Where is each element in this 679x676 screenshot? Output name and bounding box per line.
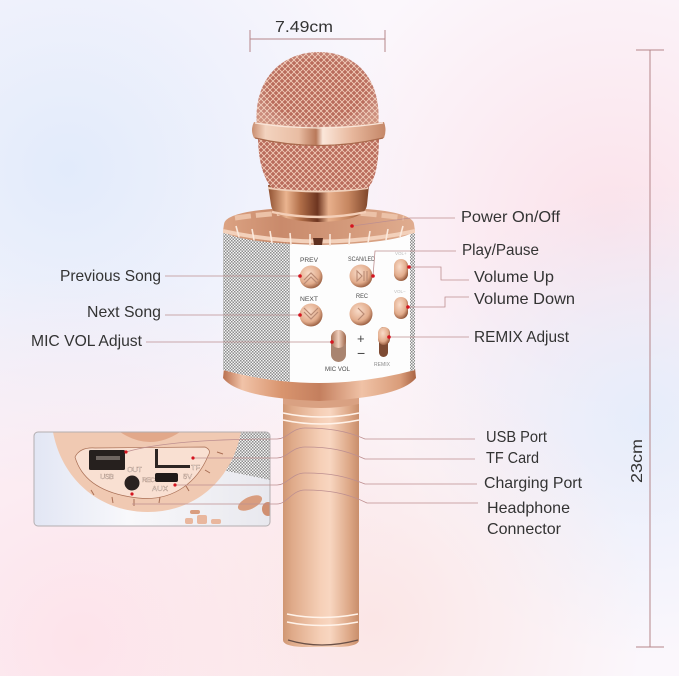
port labels: USB: [100, 472, 114, 481]
USB port: [89, 450, 125, 470]
handle: [283, 392, 359, 647]
port labels: REC: [142, 477, 155, 484]
control labels: REMIX: [374, 362, 390, 368]
grille ring: [252, 122, 386, 146]
control labels: +: [357, 331, 365, 346]
charging port: [155, 473, 178, 482]
dimension: height: 23cm: [629, 439, 646, 483]
feature labels: Volume Down: [474, 291, 575, 308]
control labels: VOL+: [395, 251, 407, 256]
control labels: SCAN/LED: [348, 256, 375, 263]
feature labels: TF Card: [486, 450, 539, 467]
control labels: REC: [356, 293, 368, 300]
control labels: −: [357, 345, 365, 361]
feature labels: [31, 209, 583, 538]
body panel: [223, 232, 415, 392]
inset speaker grill: [226, 432, 270, 480]
speaker grill: [223, 232, 290, 392]
dimension: width: [250, 19, 385, 52]
right leader lines: [352, 218, 469, 337]
top ring with ticks: [223, 207, 415, 246]
feature labels: Play/Pause: [462, 242, 539, 259]
feature labels: Power On/Off: [461, 209, 561, 226]
feature labels: USB Port: [486, 429, 548, 446]
left leader lines: [126, 276, 478, 504]
control labels: VOL−: [394, 289, 406, 294]
feature labels: Connector: [487, 521, 562, 538]
feature labels: Next Song: [87, 304, 161, 321]
feature labels: MIC VOL Adjust: [31, 333, 143, 350]
buttons: [300, 259, 408, 362]
feature labels: Charging Port: [484, 475, 583, 492]
control labels: [300, 251, 407, 373]
mesh grille: [256, 52, 379, 190]
control labels: NEXT: [300, 296, 318, 303]
feature labels: Headphone: [487, 500, 570, 517]
inset small controls: [185, 495, 270, 524]
port labels: AUX: [152, 484, 168, 493]
dimension: height: [629, 50, 664, 647]
port labels: 5V: [183, 472, 192, 481]
callout dots: [124, 224, 411, 496]
dimension: width: 7.49cm: [275, 19, 333, 36]
inset base disc: [53, 432, 241, 512]
feature labels: REMIX Adjust: [474, 329, 570, 346]
neck collar: [268, 185, 369, 222]
inset: port closeup: [34, 432, 274, 526]
control labels: MIC VOL: [325, 366, 350, 373]
TF card slot: [155, 449, 190, 468]
inset frame: [34, 432, 270, 526]
microphone: [223, 52, 416, 647]
port labels: TF: [191, 463, 201, 472]
feature labels: Volume Up: [474, 269, 554, 286]
lower collar band: [223, 368, 416, 401]
port labels: [100, 464, 200, 492]
control labels: PREV: [300, 257, 319, 264]
feature labels: Previous Song: [60, 268, 161, 285]
headphone jack: [124, 476, 140, 490]
port labels: OUT: [127, 465, 142, 474]
